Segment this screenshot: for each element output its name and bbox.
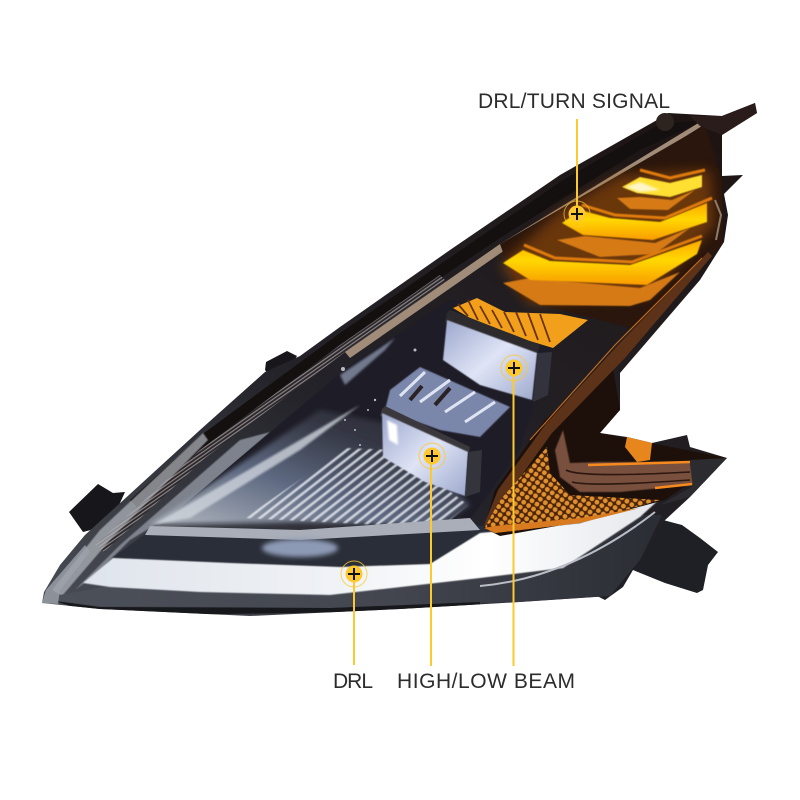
callout: DRL	[333, 561, 373, 693]
turn signal bar 2	[562, 203, 707, 240]
marker	[341, 561, 367, 587]
marker rim glow	[484, 508, 640, 533]
top bezel band	[130, 120, 705, 510]
heat sink fins	[458, 300, 550, 342]
diagonal copper highlight	[530, 258, 702, 440]
side amber strip dark surround	[484, 362, 727, 536]
right edge highlights	[715, 200, 721, 240]
callout: high/low beam lower	[397, 443, 575, 693]
turn signal dim band 1	[617, 190, 695, 210]
callout: high/low beam upper	[501, 355, 527, 666]
headlight assembly	[42, 103, 757, 616]
turn signal bar 3	[503, 240, 702, 285]
lower band reflection	[262, 539, 338, 557]
upper reflector streak	[340, 338, 395, 385]
DRL lower edge	[55, 515, 662, 608]
lens white arc	[480, 512, 655, 586]
label: HIGH/LOW BEAM	[397, 670, 575, 693]
top rear bracket	[690, 103, 757, 135]
turn signal dim band 3	[503, 272, 680, 306]
upper projector housing top	[445, 310, 540, 355]
upper cavity glow	[500, 125, 722, 330]
rear connector housing	[585, 520, 718, 600]
leader line	[576, 119, 578, 208]
bezel ribbed strip	[95, 275, 446, 552]
bezel left light reflection	[52, 433, 208, 596]
amber heat sink	[453, 298, 588, 348]
marker	[564, 201, 590, 227]
lamp body	[42, 103, 757, 616]
amber side marker	[485, 447, 660, 533]
marker	[419, 443, 445, 469]
label: DRL/TURN SIGNAL	[478, 90, 670, 113]
light reflector rim	[145, 518, 480, 540]
left mounting tab	[69, 484, 125, 532]
lower projector lens	[382, 413, 468, 496]
amber top outlines	[524, 170, 712, 262]
dark lower band	[112, 525, 490, 567]
reflector stripes	[245, 448, 468, 528]
top clip tab	[265, 351, 297, 378]
dust sparkle	[341, 348, 416, 446]
DRL light bar	[83, 497, 662, 595]
bezel grey lens band	[75, 432, 270, 590]
marker	[501, 355, 527, 381]
copper band highlight	[588, 462, 692, 488]
label: DRL	[333, 670, 373, 693]
callout: DRL/turn signal	[478, 90, 670, 227]
upper projector lens	[443, 320, 537, 400]
top bolt	[656, 113, 674, 131]
turn signal dim band 2	[557, 228, 690, 257]
diagonal copper rim	[484, 252, 712, 530]
upper projector side	[533, 352, 552, 402]
reflector surface	[150, 410, 470, 525]
central reflector shadows	[410, 386, 450, 405]
lamp interior details	[42, 120, 727, 616]
leader line	[512, 368, 514, 666]
central reflector streaks	[400, 372, 495, 422]
left tip lens	[42, 545, 90, 604]
bottom dark edge	[58, 602, 480, 614]
leader line	[353, 574, 355, 665]
reflector bright streak	[155, 405, 360, 524]
inner dark cavity	[160, 406, 305, 525]
central reflector	[385, 367, 510, 437]
right tip	[660, 458, 727, 505]
lower projector top edge	[380, 406, 470, 456]
bezel amber reflection line	[345, 122, 702, 358]
copper band ribs	[566, 470, 690, 484]
lower projector side	[465, 450, 482, 497]
leader line	[430, 456, 432, 666]
orange tab	[625, 437, 652, 462]
turn signal bar 1	[622, 175, 702, 197]
turn signal glow	[500, 170, 715, 305]
copper curved band	[555, 430, 693, 492]
